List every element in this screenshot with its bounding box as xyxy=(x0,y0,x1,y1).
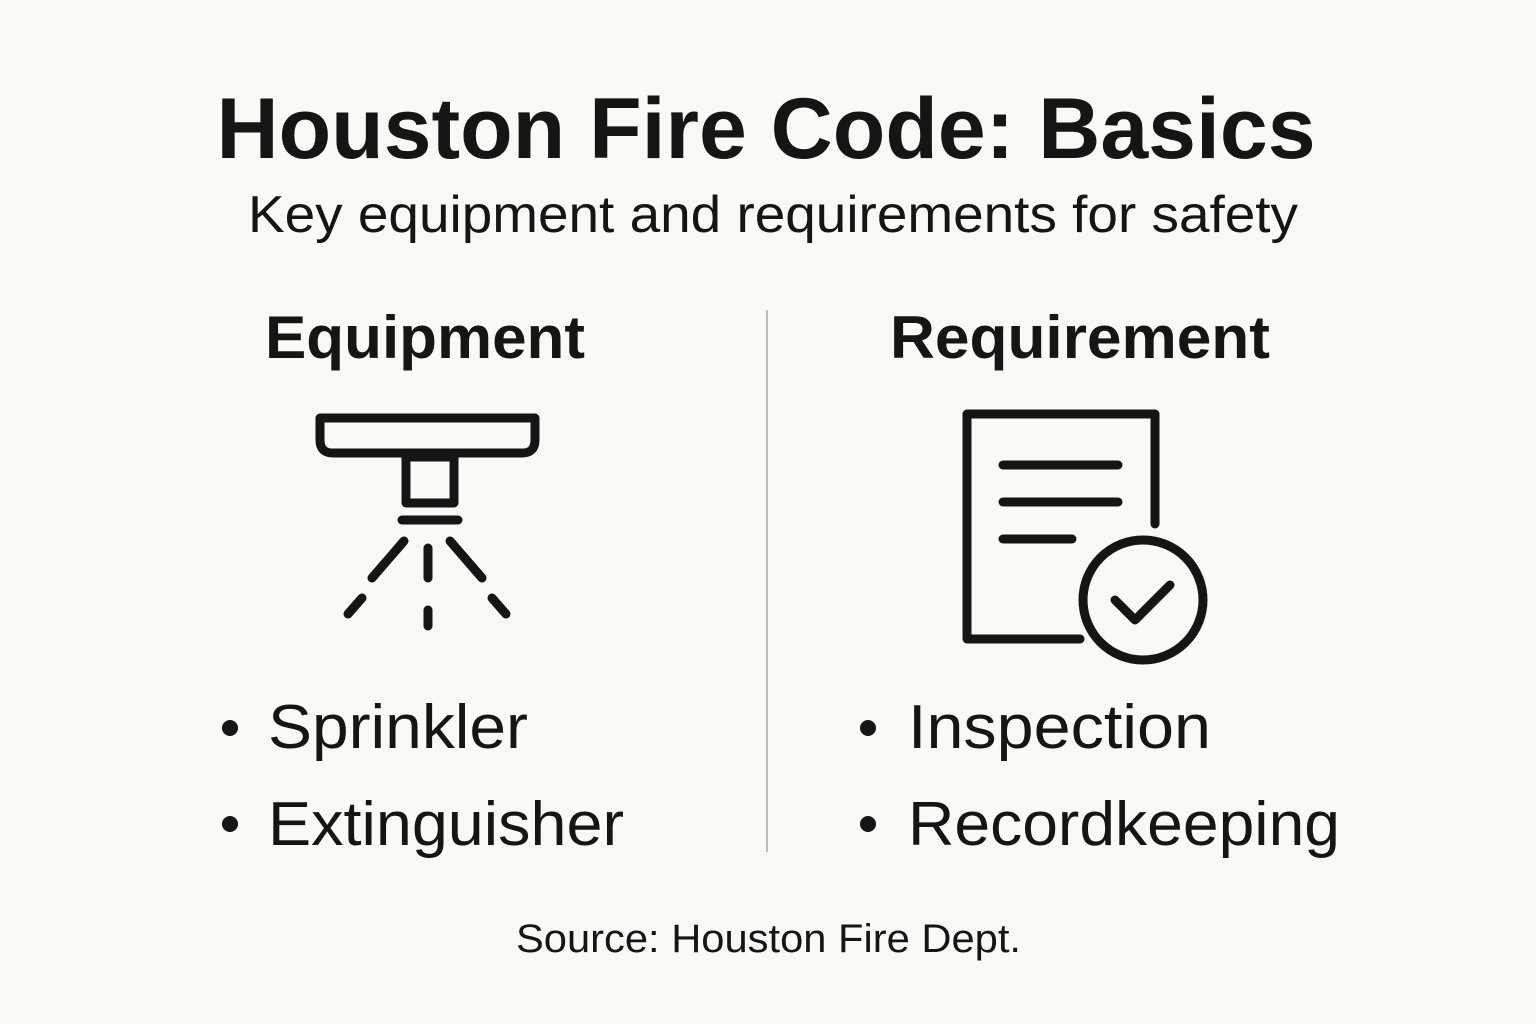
source note: Source: Houston Fire Dept. xyxy=(516,917,1021,961)
list: equipment items: Extinguisher xyxy=(268,790,624,859)
icon: document with check xyxy=(967,414,1203,660)
heading: Requirement: Requirement xyxy=(890,304,1270,371)
list: equipment items xyxy=(222,693,624,859)
list: equipment items: Sprinkler xyxy=(268,693,528,762)
title: Houston Fire Code: Basics xyxy=(216,81,1316,177)
subtitle: Key equipment and requirements for safety xyxy=(248,186,1298,244)
list: requirement items: Recordkeeping xyxy=(908,790,1340,859)
list: requirement items: Inspection xyxy=(908,693,1211,762)
panel: requirement xyxy=(860,304,1340,859)
panel: equipment xyxy=(222,304,624,859)
icon: sprinkler xyxy=(320,418,535,626)
heading: Equipment: Equipment xyxy=(265,304,585,371)
list: requirement items xyxy=(860,693,1340,859)
